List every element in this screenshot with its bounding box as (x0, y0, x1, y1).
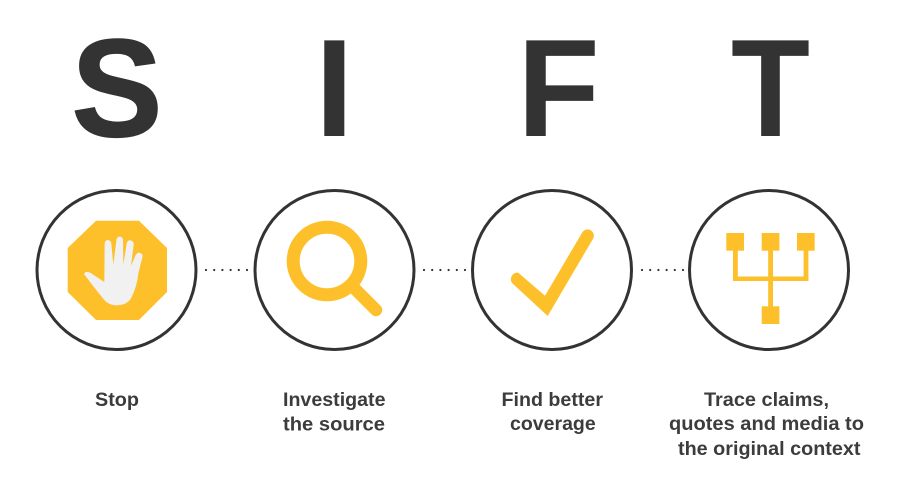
icon: tree diagram (726, 233, 815, 324)
icon: check mark (511, 229, 594, 316)
caption: trace claims: the original context (678, 439, 861, 460)
circle outline (472, 190, 632, 350)
caption: investigate the source (283, 390, 386, 436)
dotted connector 2 (424, 269, 465, 271)
icon: magnifying glass (293, 227, 376, 310)
letter F: F (517, 11, 600, 166)
step 4: trace circle (690, 190, 848, 350)
caption: trace claims: quotes and media to (669, 414, 864, 435)
caption: find better coverage (502, 390, 604, 435)
caption: find better coverage: coverage (510, 414, 596, 435)
caption: trace claims (669, 390, 864, 460)
letter S: S (72, 11, 162, 166)
dotted connector 1 (206, 269, 247, 271)
caption: trace claims: Trace claims, (704, 390, 829, 411)
step 2: investigate circle (255, 190, 414, 350)
icon: hand (84, 237, 143, 305)
caption: investigate the source: the source (283, 414, 385, 436)
dotted connector 3 (642, 269, 683, 271)
caption: investigate the source: Investigate (283, 390, 386, 411)
step 3: find better coverage circle (472, 190, 632, 350)
icon: stop sign (68, 221, 167, 320)
caption: stop: Stop (95, 390, 139, 411)
step 1: stop circle (37, 190, 196, 350)
letter T: T (731, 11, 810, 166)
title letters: SIFT (72, 11, 810, 166)
circle outline (255, 190, 414, 350)
letter I: I (315, 11, 354, 166)
circle outline (690, 190, 848, 350)
circle outline (37, 190, 196, 350)
caption: find better coverage: Find better (502, 390, 604, 411)
